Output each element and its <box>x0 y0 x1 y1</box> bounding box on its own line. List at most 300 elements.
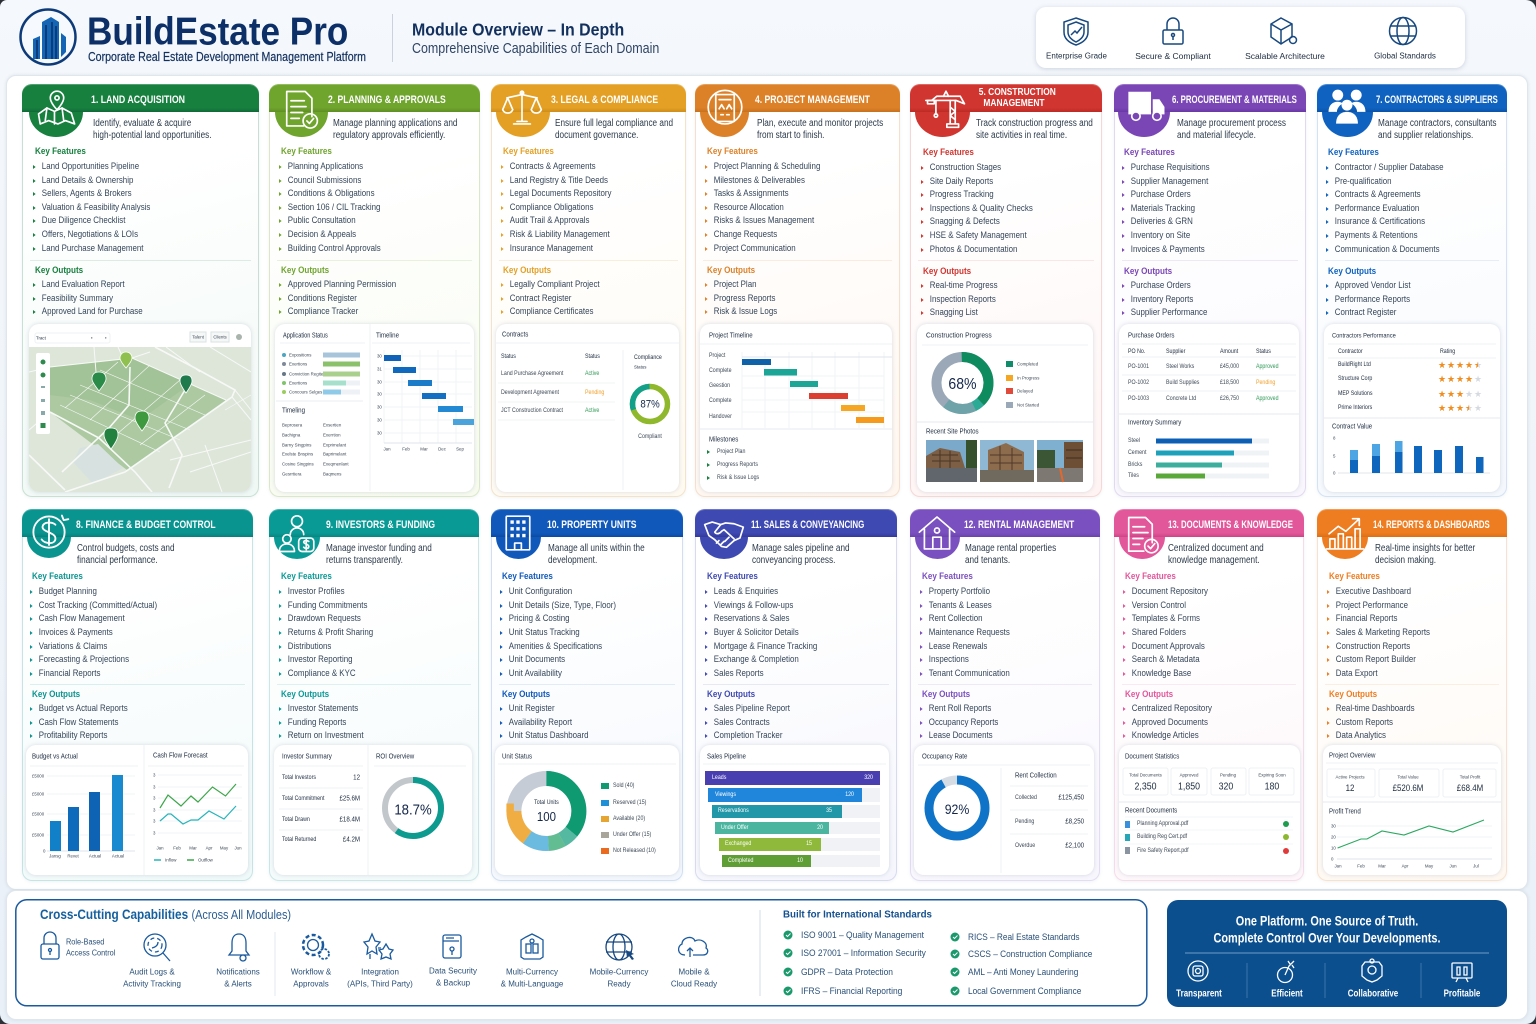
feature list: Cost Tracking (Committed/Actual) <box>39 600 157 610</box>
recent documents <box>1125 807 1293 854</box>
progress donut: Construction Progress <box>926 332 992 340</box>
output list <box>501 279 600 316</box>
feature list: Land Purchase Management <box>42 243 144 253</box>
gantt chart: 30 <box>377 379 382 385</box>
inventory summary bars: Cement <box>1128 450 1147 456</box>
profit trend line chart <box>1329 808 1492 869</box>
icon: dollar coin <box>32 514 70 549</box>
output list: Feasibility Summary <box>42 293 113 303</box>
icon: scales <box>502 90 542 125</box>
standards list right: RICS – Real Estate Standards <box>968 932 1080 942</box>
subheading: Key Outputs <box>707 265 755 275</box>
feature list: Land Details & Ownership <box>42 175 133 185</box>
ratings table: Rating <box>1440 349 1455 355</box>
item: workflow: Approvals <box>293 980 329 988</box>
funnel bars: 10 <box>797 858 803 864</box>
inventory summary bars: Bricks <box>1128 462 1143 468</box>
item: efficient: Efficient <box>1271 987 1303 999</box>
compliance donut: Status <box>634 364 647 370</box>
funnel bars: 15 <box>806 841 812 847</box>
purchase orders table: PO-1001 <box>1128 364 1149 370</box>
output list <box>500 702 588 743</box>
feature list: Contractor / Supplier Database <box>1335 162 1444 172</box>
standards list right: Local Government Compliance <box>968 986 1082 996</box>
occupancy dashboard <box>914 745 1094 875</box>
panel: 2 planning and approvals <box>269 84 480 497</box>
panel: 7 contractors and suppliers <box>1317 84 1507 497</box>
feature list: Public Consultation <box>288 215 356 225</box>
legend: In Progress <box>1017 375 1040 381</box>
profit trend line chart: Profit Trend <box>1329 808 1361 816</box>
description: site activities in real time. <box>976 130 1067 141</box>
stat boxes: Total Value <box>1397 774 1419 780</box>
item: profitable: Profitable <box>1444 987 1480 999</box>
item: workflow <box>291 935 332 988</box>
sales pipeline funnel: Sales Pipeline <box>707 753 746 761</box>
feature list <box>1122 162 1210 254</box>
feature list: Distributions <box>288 641 331 651</box>
ratings table: ★★★★ <box>1438 374 1473 384</box>
funnel bars: 120 <box>845 792 854 798</box>
output list: Inspection Reports <box>930 294 996 304</box>
heading: MANAGEMENT <box>983 96 1045 108</box>
feature list: Project Performance <box>1336 600 1408 610</box>
unit donut <box>514 778 579 844</box>
heading: 11. SALES & CONVEYANCING <box>751 519 864 531</box>
ROI donut: ROI Overview <box>376 753 414 761</box>
rent collection: Rent Collection <box>1015 772 1057 780</box>
purchase orders table: Steel Works <box>1166 364 1194 370</box>
heading <box>979 86 1056 108</box>
budget vs actual bar chart <box>30 753 138 859</box>
funnel bars: Reservations <box>718 808 749 814</box>
heading: 10. PROPERTY UNITS <box>547 519 636 531</box>
feature list: Search & Metadata <box>1132 654 1200 664</box>
gantt chart: Timeline <box>376 332 399 340</box>
output list: Centralized Repository <box>1132 703 1212 713</box>
feature list: Leads & Enquiries <box>714 586 778 596</box>
feature list: Unit Status Tracking <box>509 627 580 637</box>
subheading: Key Features <box>922 571 973 581</box>
investor summary: Total Returned <box>282 837 316 843</box>
item: audit logs: Audit Logs & <box>129 968 175 976</box>
description: Manage investor funding and <box>326 543 432 554</box>
item: collaborative: Collaborative <box>1348 987 1398 999</box>
investor summary: £18.4M <box>339 816 360 824</box>
subheading: Key Outputs <box>281 265 329 275</box>
unit donut: Total Units <box>534 800 559 806</box>
gantt chart: Project <box>709 353 726 359</box>
purchase orders table: Build Supplies <box>1166 380 1200 386</box>
panel: 8 finance and budget control <box>22 509 253 881</box>
output list: Rent Roll Reports <box>929 703 991 713</box>
feature list: Shared Folders <box>1132 627 1186 637</box>
output list <box>279 703 364 740</box>
contracts table: Land Purchase Agreement <box>501 371 564 377</box>
stat boxes: 180 <box>1265 780 1279 792</box>
feature list: Variations & Claims <box>39 641 107 651</box>
feature list: Drawdown Requests <box>288 613 361 623</box>
subheading: Key Features <box>281 146 332 156</box>
gantt chart: 30 <box>377 404 382 410</box>
toolbar: • <box>91 335 93 341</box>
header: brand <box>19 8 366 66</box>
milestones: Project Plan <box>717 449 745 455</box>
panel: 6 procurement and materials <box>1114 84 1306 497</box>
feature list: Legal Documents Repository <box>510 188 611 198</box>
cash flow line chart: Inflow <box>165 857 177 863</box>
description: Manage rental properties <box>965 543 1056 554</box>
purchase orders table <box>1122 332 1296 402</box>
description: and material lifecycle. <box>1177 130 1256 141</box>
cash flow line chart: 3 <box>153 795 156 801</box>
timeline table: Baprimelant <box>323 451 347 457</box>
output list: Snagging List <box>930 307 978 317</box>
timeline table <box>282 407 349 477</box>
output list <box>279 279 396 316</box>
output list <box>1327 702 1415 743</box>
purchase orders table: £26,750 <box>1220 396 1239 402</box>
heading: 13. DOCUMENTS & KNOWLEDGE <box>1168 519 1293 531</box>
subheading: Key Features <box>707 146 758 156</box>
description: Plan, execute and monitor projects <box>757 118 883 129</box>
toolbar <box>35 332 242 343</box>
feature list: Photos & Documentation <box>930 244 1017 254</box>
description: development. <box>548 555 597 566</box>
toolbar: Clients <box>213 334 227 340</box>
feature list: Communication & Documents <box>1335 244 1440 254</box>
output list: Sales Pipeline Report <box>714 703 790 713</box>
compliance donut <box>632 355 668 440</box>
icon: investors <box>278 515 315 552</box>
budget vs actual bar chart: Budget vs Actual <box>32 753 78 761</box>
item: data security: & Backup <box>436 978 471 988</box>
description: Manage all units within the <box>548 543 645 554</box>
feature list: Document Repository <box>1132 586 1208 596</box>
gantt chart: Jan <box>383 446 391 452</box>
item: mobile-currency <box>590 934 648 988</box>
legend: Available (20) <box>613 816 645 822</box>
feature list: Inspections & Quality Checks <box>930 203 1033 213</box>
item: efficient <box>1271 961 1303 999</box>
description: Manage contractors, consultants <box>1378 118 1497 129</box>
gantt chart: 30 <box>377 391 382 397</box>
timeline table: Exeqmenlant <box>323 461 349 467</box>
output list: Custom Reports <box>1336 717 1393 727</box>
subheading: Key Features <box>1124 147 1175 157</box>
investor summary: Investor Summary <box>282 753 333 761</box>
slogan: Complete Control Over Your Developments. <box>1213 930 1441 946</box>
purchase orders table: PO No. <box>1128 349 1146 355</box>
profit trend line chart: Jun <box>1449 863 1457 869</box>
item: role-based access: Access Control <box>66 948 116 958</box>
feature list: Financial Reports <box>1336 613 1397 623</box>
icon: logo <box>20 10 76 64</box>
budget vs actual bar chart: Actual <box>112 853 124 859</box>
project overview dashboard <box>1323 745 1501 875</box>
feature list: Change Requests <box>714 229 777 239</box>
description <box>326 543 432 566</box>
icon: crane <box>925 90 966 128</box>
output list: Performance Reports <box>1335 294 1410 304</box>
stat boxes: Total Profit <box>1460 774 1481 780</box>
gantt chart: Handover <box>709 414 732 420</box>
subheading: Key Features <box>707 571 758 581</box>
purchase orders table: PO-1003 <box>1128 396 1149 402</box>
feature list <box>33 161 150 253</box>
cash flow line chart: 3 <box>153 818 156 824</box>
output list: Legally Compliant Project <box>510 279 600 289</box>
contracts table: Status <box>501 354 516 360</box>
item: mobile cloud <box>671 937 717 988</box>
contracts table: Status <box>585 354 600 360</box>
feature list: Site Daily Reports <box>930 176 993 186</box>
toolbar: • <box>105 335 107 341</box>
feature list: Section 106 / CIL Tracking <box>288 202 380 212</box>
feature list: Contracts & Agreements <box>1335 189 1421 199</box>
application status: Expositions <box>289 352 312 358</box>
feature list: Investor Reporting <box>288 654 353 664</box>
description: Identify, evaluate & acquire <box>93 118 191 129</box>
cash flow line chart: Feb <box>173 845 181 851</box>
application status dashboard <box>275 324 474 492</box>
cash flow line chart <box>148 752 244 863</box>
cash flow line chart: 3 <box>153 784 156 790</box>
panel: 14 reports and dashboards <box>1317 509 1507 881</box>
purchase orders table: Concrete Ltd <box>1166 396 1196 402</box>
project timeline dashboard <box>700 324 892 492</box>
application status: Exertions <box>289 361 308 367</box>
feature list: Buyer & Solicitor Details <box>714 627 799 637</box>
output list: Risk & Issue Logs <box>714 306 777 316</box>
feature list: Data Export <box>1336 668 1378 678</box>
funnel bars: Leads <box>712 775 727 781</box>
feature list: Document Approvals <box>1132 641 1205 651</box>
icon: growth chart <box>1324 512 1366 554</box>
item: notifications <box>216 934 260 988</box>
recent documents: Planning Approval.pdf <box>1137 821 1189 827</box>
gantt chart <box>372 332 474 452</box>
feature list: Risk & Liability Management <box>510 229 610 239</box>
feature list: Financial Reports <box>39 668 100 678</box>
timeline table: Gesrrtiera <box>282 471 302 477</box>
panel: 10 property units <box>491 509 683 881</box>
standards list right: AML – Anti Money Laundering <box>968 967 1079 977</box>
output list <box>1123 702 1212 743</box>
description <box>333 118 457 141</box>
timeline table: Exprimelant <box>323 442 347 448</box>
feature list: Viewings & Follow-ups <box>714 600 793 610</box>
map sidebar <box>36 353 50 434</box>
panel: 5 construction management <box>910 84 1102 497</box>
feature list: Funding Commitments <box>288 600 367 610</box>
site photos: Recent Site Photos <box>926 428 979 436</box>
subheading: Key Outputs <box>281 688 329 698</box>
profit trend line chart: Jan <box>1334 863 1342 869</box>
purchase orders table: PO-1002 <box>1128 380 1149 386</box>
output list: Lease Documents <box>929 730 993 740</box>
feature list: Compliance & KYC <box>288 668 356 678</box>
gantt chart: 30 <box>377 353 382 359</box>
cash flow line chart: 3 <box>153 772 156 778</box>
feature list: Planning Applications <box>288 161 363 171</box>
gantt chart: Dec <box>438 446 447 452</box>
feature list: Invoices & Payments <box>1131 244 1205 254</box>
description: Manage planning applications and <box>333 118 457 129</box>
subheading: Key Features <box>1328 147 1379 157</box>
standards list left <box>784 930 926 996</box>
standards list left: GDPR – Data Protection <box>801 967 893 977</box>
subheading: Key Outputs <box>503 265 551 275</box>
item: role-based access <box>41 932 116 959</box>
subheading: Key Outputs <box>1124 266 1172 276</box>
output list: Supplier Performance <box>1131 307 1207 317</box>
description <box>555 118 673 141</box>
description: from start to finish. <box>757 130 824 141</box>
heading: Module Overview – In Depth <box>412 20 624 40</box>
item: multi-currency <box>501 934 564 988</box>
investor summary: Total Drawn <box>282 817 310 823</box>
gantt chart: Project Timeline <box>709 332 753 340</box>
budget vs actual bar chart: Jansg <box>49 853 61 859</box>
label: Scalable Architecture <box>1245 51 1325 61</box>
icon: global <box>1390 18 1416 44</box>
item: collaborative <box>1348 959 1398 999</box>
item: transparent <box>1176 961 1222 999</box>
standards list right <box>950 932 1093 996</box>
milestones: Progress Reports <box>717 462 758 468</box>
output list: Profitability Reports <box>39 730 107 740</box>
feature list: Investor Profiles <box>288 586 345 596</box>
compliance donut: 87% <box>640 399 660 411</box>
feature list: Templates & Forms <box>1132 613 1200 623</box>
rent collection: Pending <box>1015 819 1034 825</box>
feature list: Project Communication <box>714 243 796 253</box>
feature list <box>1327 585 1430 680</box>
legend <box>601 783 656 854</box>
feature list: Supplier Management <box>1131 176 1208 186</box>
feature list: Due Diligence Checklist <box>42 215 125 225</box>
standards list right: CSCS – Construction Compliance <box>968 949 1093 959</box>
compliance donut: Compliance <box>634 355 662 361</box>
stat boxes <box>1327 769 1496 797</box>
occupancy donut: 92% <box>945 801 970 817</box>
output list: Investor Statements <box>288 703 358 713</box>
subheading: Key Features <box>1125 571 1176 581</box>
cash flow line chart: 3 <box>153 830 156 836</box>
subheading: Key Features <box>923 147 974 157</box>
feature list: Project Planning & Scheduling <box>714 161 820 171</box>
subheading: Key Outputs <box>707 688 755 698</box>
contract value chart: 5 <box>1333 453 1336 459</box>
panel: cross-cutting capabilities <box>15 899 1148 1007</box>
description <box>1168 543 1264 567</box>
stat boxes: Pending <box>1220 772 1236 778</box>
rent collection: £2,100 <box>1065 842 1084 850</box>
heading: 4. PROJECT MANAGEMENT <box>755 94 870 106</box>
stat boxes: 320 <box>1219 780 1233 792</box>
ROI donut <box>374 753 466 836</box>
application status: Concours Selges <box>289 389 323 395</box>
output list: Knowledge Articles <box>1132 730 1199 740</box>
legend: Reserved (15) <box>613 800 647 806</box>
ratings table: ★★★★★ <box>1438 360 1482 370</box>
panel: call to action <box>1167 900 1507 1007</box>
feature list: Land Registry & Title Deeds <box>510 175 608 185</box>
item: workflow: Workflow & <box>291 968 332 976</box>
feature list: Tenants & Leases <box>929 600 992 610</box>
subheading: Key Outputs <box>922 688 970 698</box>
output list: Availability Report <box>509 717 572 727</box>
ROI donut: 18.7% <box>394 801 432 817</box>
output list: Real-time Dashboards <box>1336 703 1415 713</box>
output list: Land Evaluation Report <box>42 279 125 289</box>
description: and tenants. <box>965 555 1010 566</box>
recent documents: Fire Safety Report.pdf <box>1137 848 1189 854</box>
output list <box>33 279 143 316</box>
timeline table: Exelste Bnspins <box>282 451 314 457</box>
feature list: Sellers, Agents & Brokers <box>42 188 132 198</box>
cash flow line chart: 3 <box>153 807 156 813</box>
output list <box>705 702 790 743</box>
investor summary <box>279 753 363 844</box>
icon: secure <box>1163 18 1183 44</box>
ratings table: Contractors Performance <box>1332 332 1396 340</box>
subheading: Key Features <box>35 146 86 156</box>
output list <box>705 279 777 316</box>
item: role-based access: Role-Based <box>66 937 104 947</box>
heading: 14. REPORTS & DASHBOARDS <box>1373 519 1490 531</box>
subheading: Key Features <box>281 571 332 581</box>
timeline table: Exerrtion <box>323 432 341 438</box>
description: Centralized document and <box>1168 543 1264 554</box>
toolbar: Talent <box>192 334 205 340</box>
budget vs actual bar chart: Revet <box>67 853 79 859</box>
output list: Purchase Orders <box>1131 280 1191 290</box>
investor summary: Total Commitment <box>282 796 325 802</box>
gantt chart: 30 <box>377 430 382 436</box>
budget vs actual bar chart: 0 <box>43 848 46 854</box>
ratings table: ★★★★★ <box>1438 403 1482 413</box>
item: notifications: & Alerts <box>224 980 252 988</box>
feature list: Mortgage & Finance Tracking <box>714 641 817 651</box>
standards list left: ISO 9001 – Quality Management <box>801 930 925 940</box>
funnel bars: 320 <box>864 775 873 781</box>
subheading: Key Outputs <box>1329 688 1377 698</box>
description: decision making. <box>1375 555 1436 566</box>
output list: Sales Contracts <box>714 717 770 727</box>
description: financial performance. <box>77 555 158 566</box>
feature list <box>705 585 817 680</box>
output list: Inventory Reports <box>1131 294 1193 304</box>
feature list: HSE & Safety Management <box>930 230 1027 240</box>
heading: 5. CONSTRUCTION <box>979 86 1056 98</box>
feature list: Compliance Obligations <box>510 202 593 212</box>
legend <box>1006 361 1040 408</box>
feature list: Pricing & Costing <box>509 613 570 623</box>
profit trend line chart: Apr <box>1402 863 1409 869</box>
ratings table: ★★★★★ <box>1438 374 1482 384</box>
output list: Approved Land for Purchase <box>42 306 143 316</box>
item: mobile-currency: Mobile-Currency <box>590 968 648 976</box>
description <box>77 543 175 566</box>
feature list: Knowledge Base <box>1132 668 1191 678</box>
description: Track construction progress and <box>976 118 1093 129</box>
output list: Conditions Register <box>288 293 357 303</box>
contracts table: JCT Construction Contract <box>501 408 563 414</box>
feature list: Sales & Marketing Reports <box>1336 627 1430 637</box>
gantt chart: Complete <box>709 368 732 374</box>
